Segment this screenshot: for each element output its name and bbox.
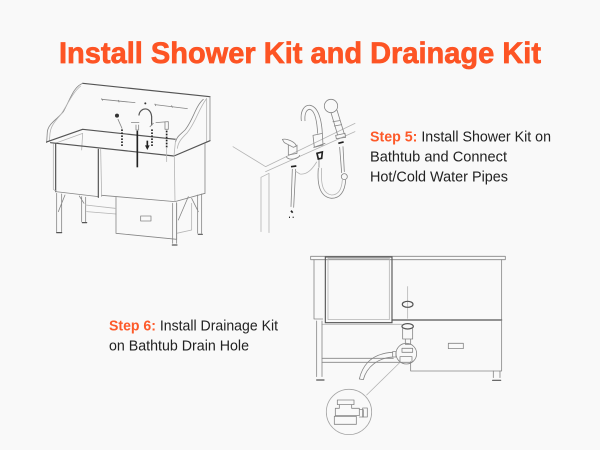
- step 5 text: [370, 130, 551, 186]
- counter edge: [233, 123, 355, 233]
- legs and drawer: [317, 320, 502, 380]
- hand shower and hose: [318, 99, 347, 198]
- faucet parts: [115, 109, 168, 167]
- drawer: [116, 197, 177, 239]
- illustration: drainage front view: [311, 256, 505, 435]
- illustration: faucet detail: [233, 99, 355, 233]
- spout: [296, 105, 325, 174]
- magnified drain callout: [326, 363, 399, 435]
- lever handle: [282, 139, 300, 218]
- step 6 text: Step 6: Install Drainage Kit: [109, 318, 278, 334]
- illustration: bathtub with shower kit parts: [47, 83, 210, 245]
- title: Install Shower Kit and Drainage Kit: [59, 37, 541, 70]
- tub back wall and rim: [47, 83, 210, 156]
- step 6 text: on Bathtub Drain Hole: [109, 338, 249, 354]
- tub front panels: [53, 143, 205, 202]
- tub body: [311, 256, 505, 324]
- tub legs: [57, 193, 202, 245]
- drain assembly: [359, 287, 417, 380]
- step 5 text: Hot/Cold Water Pipes: [370, 170, 508, 186]
- step 5 text: Step 5: Install Shower Kit on: [370, 130, 551, 146]
- step 6 text: [109, 318, 278, 354]
- step 5 text: Bathtub and Connect: [370, 150, 507, 166]
